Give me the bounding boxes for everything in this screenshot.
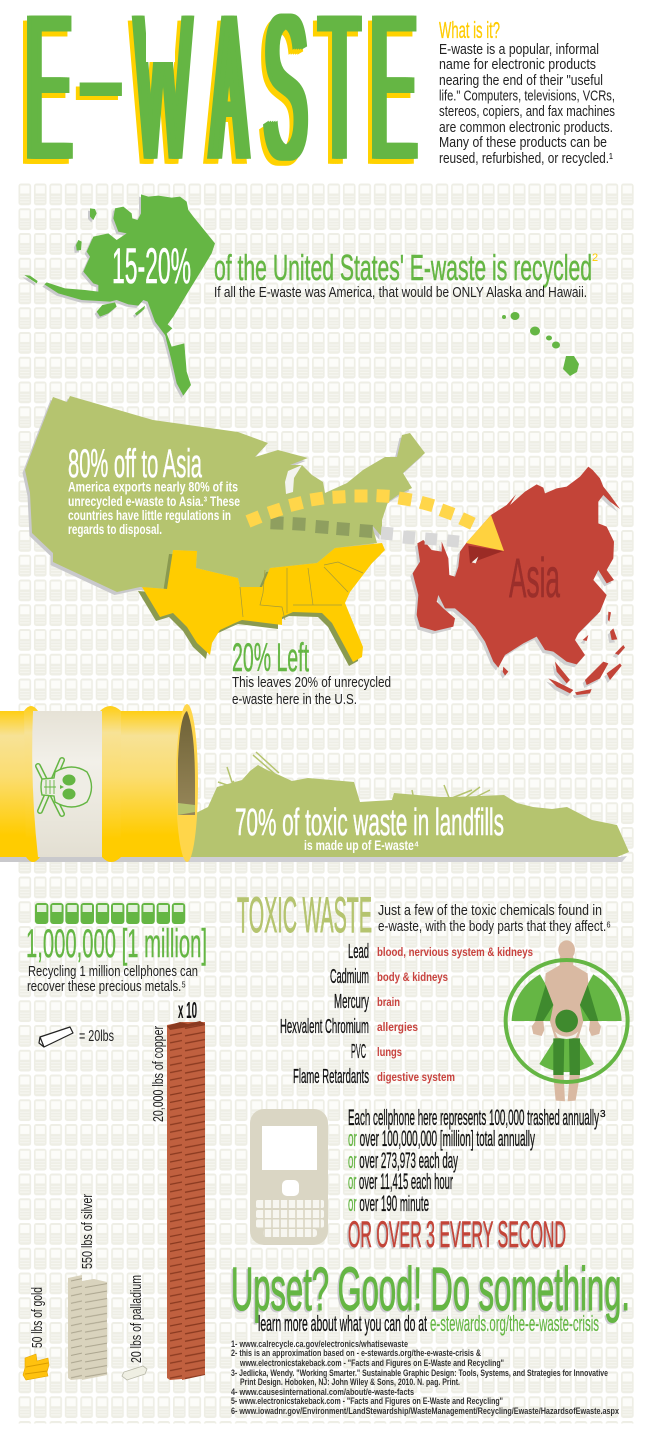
text: toxic intro <box>378 903 611 935</box>
text: cellphone statistics: or over 273,973 each day <box>348 1148 458 1173</box>
text: x 10 <box>178 997 197 1023</box>
southern states (yellow) <box>142 543 385 662</box>
text: toxic intro: Just a few of the toxic chemicals found in <box>378 903 602 919</box>
alaska <box>22 194 215 398</box>
label: copper: 20,000 lbs of copper <box>151 1026 167 1122</box>
barrel body <box>0 711 188 857</box>
text: Hexvalent Chromium <box>280 1016 369 1038</box>
text block: e-waste definition: Many of these products can be <box>439 135 607 151</box>
list: chemical names <box>280 941 369 1088</box>
text block: e-waste definition: E-waste is a popular, informal <box>439 42 599 58</box>
waste in opening <box>178 803 195 815</box>
text: Mercury <box>334 991 369 1013</box>
list: affected body parts: body & kidneys <box>377 972 448 984</box>
icon: radiation symbol with human body <box>506 940 628 1101</box>
references: Print Design. Hoboken, NJ: John Wiley & Sons, 2010. N. pag. Print. <box>240 1377 460 1388</box>
references: 5- www.electronicstakeback.com - "Facts and Figures on E-Waste and Recycling" <box>231 1396 503 1407</box>
barrel <box>0 704 198 862</box>
list: affected body parts: blood, nervious system & kidneys <box>377 947 533 959</box>
text: 20% remaining: e-waste here in the U.S. <box>232 692 357 708</box>
text: 15-20% <box>112 238 191 294</box>
band <box>32 711 102 857</box>
text block: e-waste definition: reused, refurbished, or recycled.¹ <box>439 151 613 167</box>
dashed arrow: yellow arc to Asia <box>246 489 476 530</box>
barrel shadow <box>0 857 190 862</box>
references: www.electronicstakeback.com - "Facts and Figures on E-Waste and Recycling" <box>239 1358 504 1369</box>
landfill debris <box>217 752 490 805</box>
heading: one million: 1,000,000 [1 million] <box>26 922 207 966</box>
label: silver: 550 lbs of silver <box>80 1194 96 1269</box>
map: Asia: Asia <box>509 546 560 609</box>
text: Lead <box>348 941 369 963</box>
text: PVC <box>351 1041 366 1063</box>
barrel opening rim <box>176 704 198 862</box>
dashed arrow: gray return path <box>270 516 460 548</box>
text block: e-waste definition: are common electronic products. <box>439 120 613 136</box>
map: Alaska and Hawaii <box>22 194 579 398</box>
stack: palladium <box>122 1366 147 1380</box>
references: 2- this is an approximation based on - e-stewards.org/the-e-waste-crisis & <box>231 1348 481 1359</box>
title: E-WASTE <box>23 0 418 204</box>
text: Cadmium <box>330 966 369 988</box>
legend: ingot equals 20lbs <box>39 1027 114 1047</box>
text: cellphone statistics: or over 11,415 each hour <box>348 1169 453 1194</box>
map: contiguous US <box>22 396 425 666</box>
text: TOXIC WASTE <box>237 887 372 943</box>
state borders <box>240 562 363 620</box>
stack: silver <box>68 1275 107 1380</box>
text: 20% Left <box>232 636 309 680</box>
text block: e-waste definition: nearing the end of their "useful <box>439 73 603 89</box>
text: recycling cellphones: recover these precious metals.⁵ <box>27 979 186 995</box>
stack: copper <box>167 1021 205 1380</box>
text: cellphone statistics: or over 190 minute <box>348 1191 429 1216</box>
south shadow <box>138 547 381 666</box>
skull and crossbones icon <box>38 760 92 814</box>
barrel inner <box>178 711 195 815</box>
list: affected body parts: brain <box>377 997 400 1009</box>
gulf <box>472 557 478 563</box>
text block: e-waste definition <box>439 42 615 167</box>
text: learn more: learn more about what you can do at <box>258 1311 427 1336</box>
footnote mark 2: 2 <box>592 252 598 264</box>
label: palladium: 20 lbs of palladium <box>129 1275 145 1363</box>
text: recycling cellphones: Recycling 1 million cellphones can <box>28 964 198 980</box>
text block: e-waste definition: name for electronic products <box>439 57 596 73</box>
text: exports: regards to disposal. <box>68 522 162 537</box>
legend: ingot equals 20lbs: = 20lbs <box>79 1028 114 1045</box>
text: exports <box>68 480 240 537</box>
text: recycling cellphones <box>27 964 198 995</box>
rib left <box>24 706 40 862</box>
text: cellphone statistics: 3 <box>600 1109 606 1120</box>
asia shape <box>413 467 625 695</box>
arrow head <box>466 515 504 551</box>
label: gold: 50 lbs of gold <box>30 1287 46 1348</box>
list: affected body parts: allergies <box>377 1022 418 1034</box>
landfill shadow <box>180 856 627 862</box>
US shape <box>25 396 425 592</box>
rib right <box>100 706 121 862</box>
text: exports: America exports nearly 80% of its <box>68 480 238 494</box>
stack: gold <box>23 1354 49 1380</box>
references: 4- www.causesinternational.com/about/e-waste-facts <box>231 1387 414 1398</box>
landfill <box>179 752 629 862</box>
map: Asia <box>410 467 625 698</box>
landfill mound <box>179 765 629 857</box>
references <box>231 1339 620 1417</box>
list: affected body parts <box>377 947 533 1084</box>
arrow shadow wedge <box>468 546 503 563</box>
subheading: made up of e-waste: is made up of E-waste⁴ <box>304 837 419 853</box>
text: 20% remaining <box>232 675 391 708</box>
hawaii islands <box>502 312 579 376</box>
text: 20% remaining: This leaves 20% of unrecycled <box>232 675 391 691</box>
text: exports: unrecycled e-waste to Asia.³ These <box>68 494 240 509</box>
list: affected body parts: lungs <box>377 1047 402 1059</box>
text: cellphone statistics <box>348 1105 606 1216</box>
row of ten cellphones icons <box>35 903 185 924</box>
list: affected body parts: digestive system <box>377 1072 455 1084</box>
icon: large cellphone <box>250 1109 328 1245</box>
heading: 80% off to Asia: 80% off to Asia <box>68 442 202 486</box>
text: exports: countries have little regulations in <box>68 508 231 523</box>
references: 1- www.calrecycle.ca.gov/electronics/whatisewaste <box>231 1339 408 1350</box>
asia shadow <box>410 470 623 698</box>
text: Flame Retardants <box>293 1066 369 1088</box>
US shadow <box>22 399 422 595</box>
lake michigan <box>285 465 302 494</box>
heading: what is it: What is it? <box>439 17 500 43</box>
